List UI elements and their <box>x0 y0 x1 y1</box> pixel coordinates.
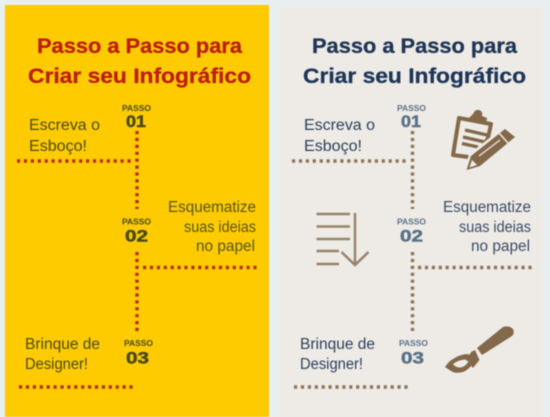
step 2 text: yellow panel: no papel <box>196 238 255 255</box>
step 1 label: yellow panel: 01 <box>126 112 146 131</box>
step 1 text: yellow panel: Esboço! <box>29 138 87 155</box>
step 2 text: beige panel <box>443 199 531 255</box>
step 3 text: beige panel: Brinque de <box>300 336 375 353</box>
step 2 label: yellow panel <box>122 218 151 246</box>
step 2 text: yellow panel: suas ideias <box>184 219 256 236</box>
panel: beige version <box>280 7 543 417</box>
title: beige panel <box>303 34 526 88</box>
step 3 text: yellow panel <box>25 336 100 373</box>
title: yellow panel: Passo a Passo para <box>37 34 243 58</box>
step 1 text: beige panel: Esboço! <box>304 138 362 155</box>
step 1 text: yellow panel: Escreva o <box>29 117 100 134</box>
icon: list with down arrow <box>316 213 368 265</box>
step 2 label: yellow panel: PASSO <box>122 218 151 226</box>
step 2 label: yellow panel: 02 <box>125 226 148 246</box>
step 3 label: yellow panel <box>124 339 153 368</box>
step 3 label: yellow panel: PASSO <box>124 339 153 348</box>
step 2 label: beige panel: PASSO <box>397 218 426 226</box>
step 2 label: beige panel: 02 <box>400 226 423 246</box>
step 3 text: yellow panel: Brinque de <box>25 336 100 353</box>
step 1 text: yellow panel <box>29 117 100 155</box>
step 3 text: yellow panel: Designer! <box>25 356 88 373</box>
title: beige panel: Passo a Passo para <box>312 34 518 58</box>
icon: paintbrush <box>445 326 514 373</box>
step 1 text: beige panel: Escreva o <box>304 117 375 134</box>
step 3 label: beige panel <box>399 339 428 368</box>
step 2 text: yellow panel: Esquematize <box>168 199 256 216</box>
dotted connector lines: beige panel <box>292 131 532 387</box>
step 1 label: beige panel: PASSO <box>397 104 426 113</box>
title: yellow panel <box>28 34 251 88</box>
dotted connector lines: yellow panel <box>17 131 257 387</box>
icon: clipboard and pencil <box>453 110 518 172</box>
step 1 label: yellow panel <box>122 104 151 131</box>
step 3 label: beige panel: 03 <box>401 348 424 368</box>
step 2 text: beige panel: Esquematize <box>443 199 531 216</box>
step 1 label: beige panel <box>397 104 426 131</box>
title: beige panel: Criar seu Infográfico <box>303 64 526 88</box>
step 1 label: yellow panel: PASSO <box>122 104 151 113</box>
step 1 label: beige panel: 01 <box>401 112 421 131</box>
step 2 text: yellow panel <box>168 199 256 255</box>
step 3 text: beige panel: Designer! <box>300 356 363 373</box>
title: yellow panel: Criar seu Infográfico <box>28 64 251 88</box>
step 2 text: beige panel: no papel <box>471 238 530 255</box>
step 2 text: beige panel: suas ideias <box>459 219 531 236</box>
step 3 label: beige panel: PASSO <box>399 339 428 348</box>
panel: yellow version <box>5 5 269 417</box>
step 1 text: beige panel <box>304 117 375 155</box>
step 3 text: beige panel <box>300 336 375 373</box>
step 3 label: yellow panel: 03 <box>126 348 149 368</box>
step 2 label: beige panel <box>397 218 426 246</box>
